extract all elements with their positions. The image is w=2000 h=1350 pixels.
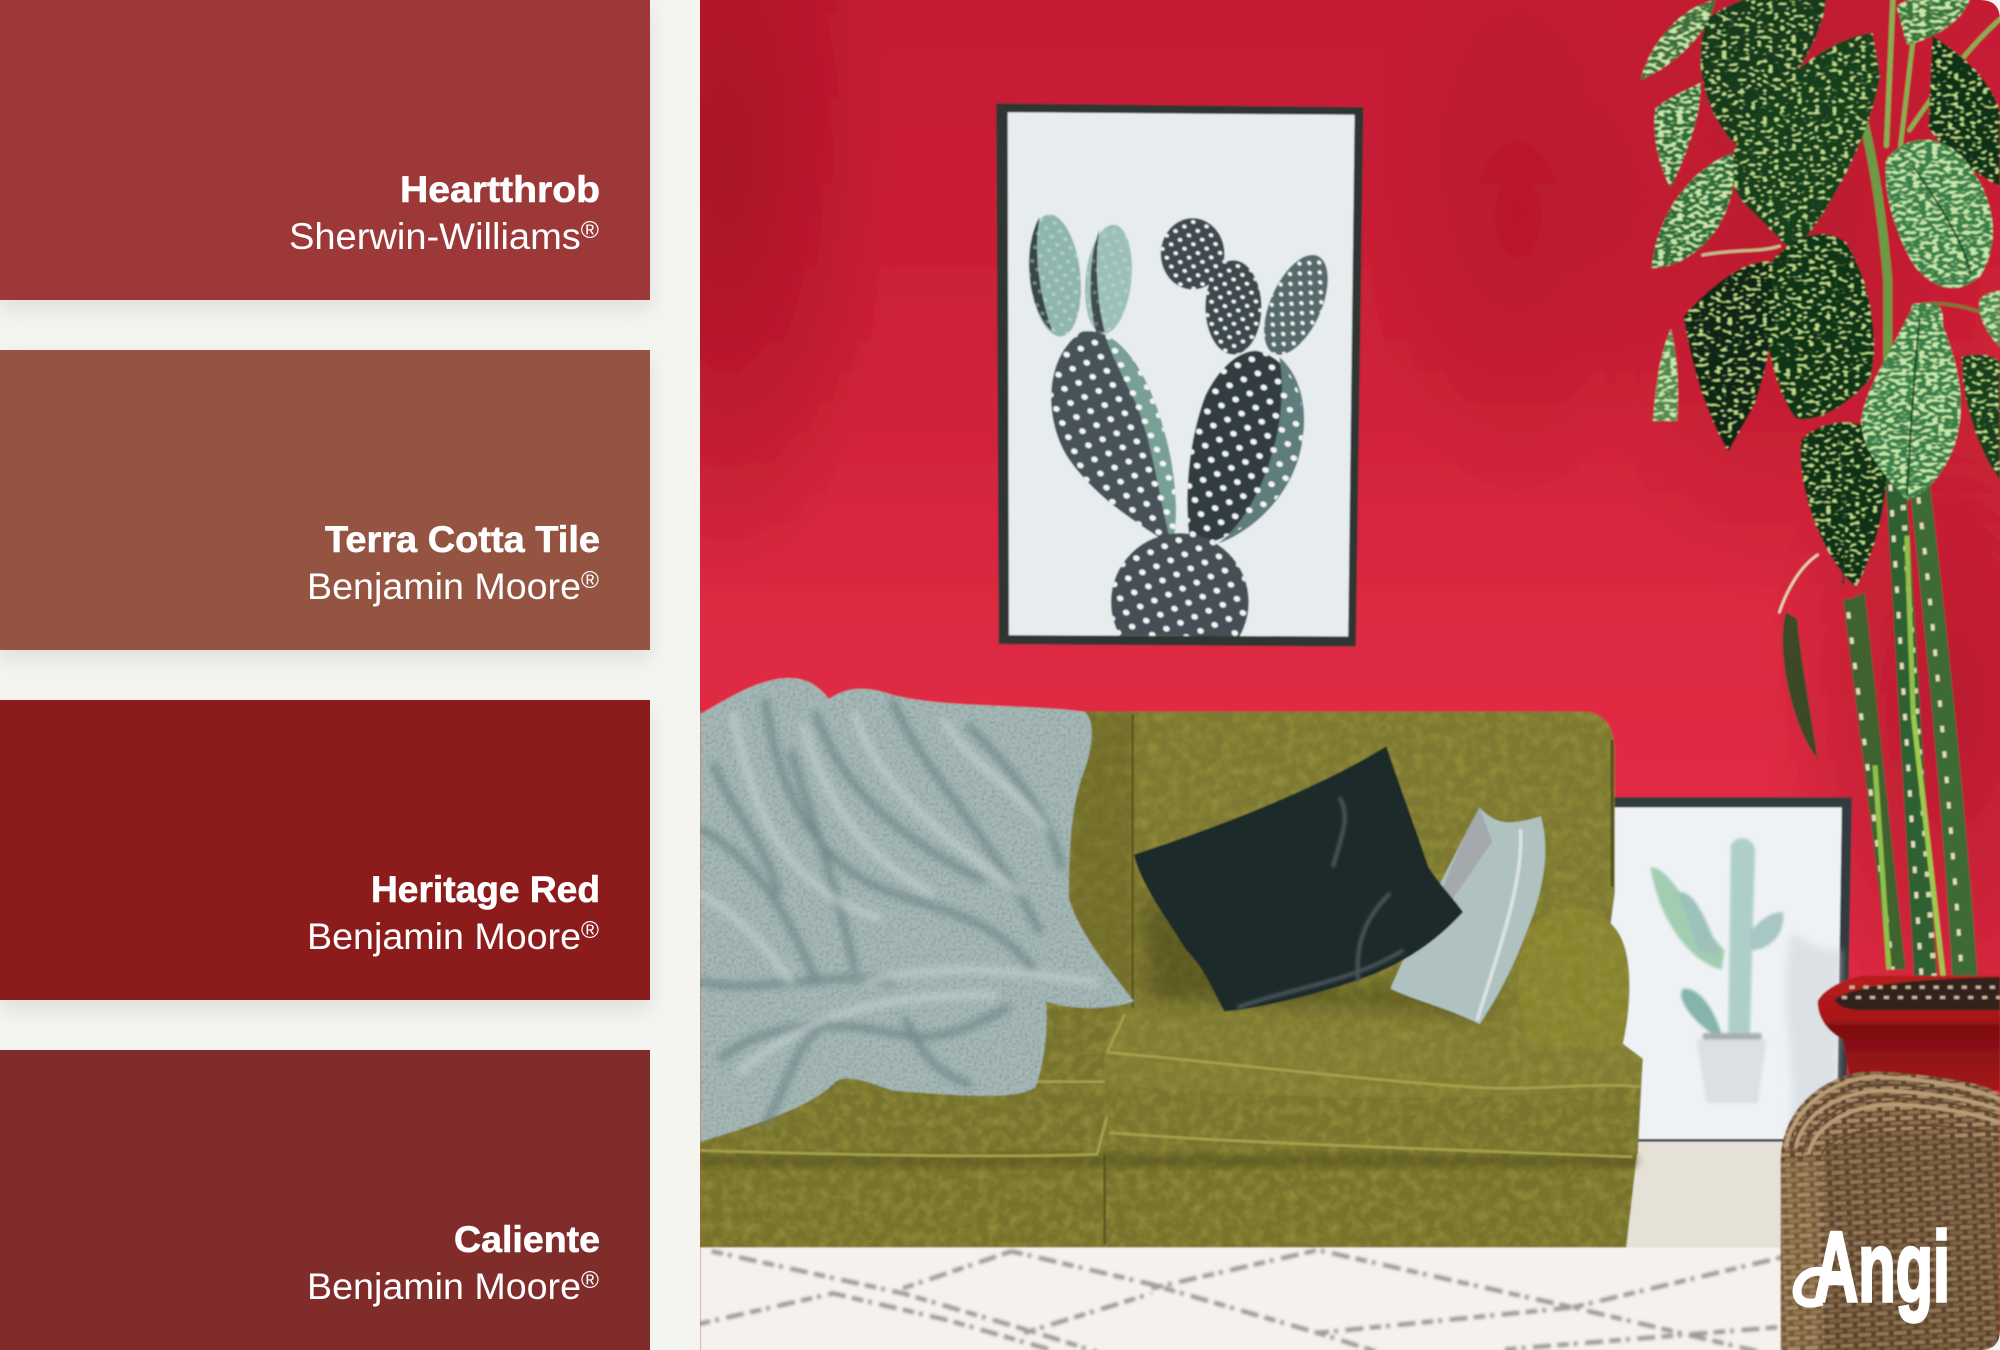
leaning framed cactus print — [1610, 796, 1853, 1143]
panel: living room photo — [561, 0, 2000, 1350]
logo: Angi — [1797, 1211, 1950, 1322]
plant trunks — [1843, 472, 1980, 1008]
swatch: Caliente: Caliente — [454, 1219, 600, 1260]
swatch: Terra Cotta Tile — [0, 350, 650, 650]
swatch: Caliente: ® — [581, 1267, 599, 1294]
sofa shading — [700, 714, 1638, 1167]
cactus painting — [1028, 214, 1329, 638]
swatch: Terra Cotta Tile: Terra Cotta Tile — [325, 519, 600, 560]
swatch: Heritage Red — [0, 700, 650, 1000]
swatch: Heartthrob: Heartthrob — [400, 169, 600, 210]
rug — [699, 1247, 1786, 1350]
dark speckled leaves — [1684, 0, 2000, 587]
sofa — [700, 712, 1643, 1247]
bright speckled leaves — [1640, 0, 2000, 500]
wicker basket — [1781, 1071, 2000, 1350]
swatch: Caliente: Benjamin Moore — [307, 1266, 576, 1307]
swatch: Heritage Red: ® — [581, 917, 599, 944]
swatch: Heartthrob — [0, 0, 650, 300]
sofa body — [700, 712, 1643, 1247]
swatch: Caliente — [0, 1050, 650, 1350]
swatch: Heartthrob: Sherwin-Williams — [289, 216, 573, 257]
swatch: Heritage Red: Heritage Red — [371, 869, 600, 910]
blue-grey throw blanket — [700, 678, 1134, 1142]
swatch: Heartthrob: ® — [581, 217, 599, 244]
framed cactus poster — [996, 103, 1364, 671]
floor — [1625, 1140, 1784, 1248]
dark green velvet pillow — [1134, 746, 1463, 1011]
red plant pot — [1818, 976, 2000, 1091]
swatch: Heritage Red: Benjamin Moore — [307, 916, 576, 957]
red wall — [561, 0, 2000, 1350]
swatch: Terra Cotta Tile: ® — [581, 567, 599, 594]
sofa seams — [1105, 714, 1612, 1245]
panel: colour swatches — [0, 0, 650, 1350]
plant stems — [1703, 0, 2000, 612]
light silver pillow — [1390, 807, 1545, 1024]
dieffenbachia plant — [1640, 0, 2000, 759]
blanket folds — [700, 702, 1097, 1122]
swatch: Terra Cotta Tile: Benjamin Moore — [307, 566, 576, 607]
